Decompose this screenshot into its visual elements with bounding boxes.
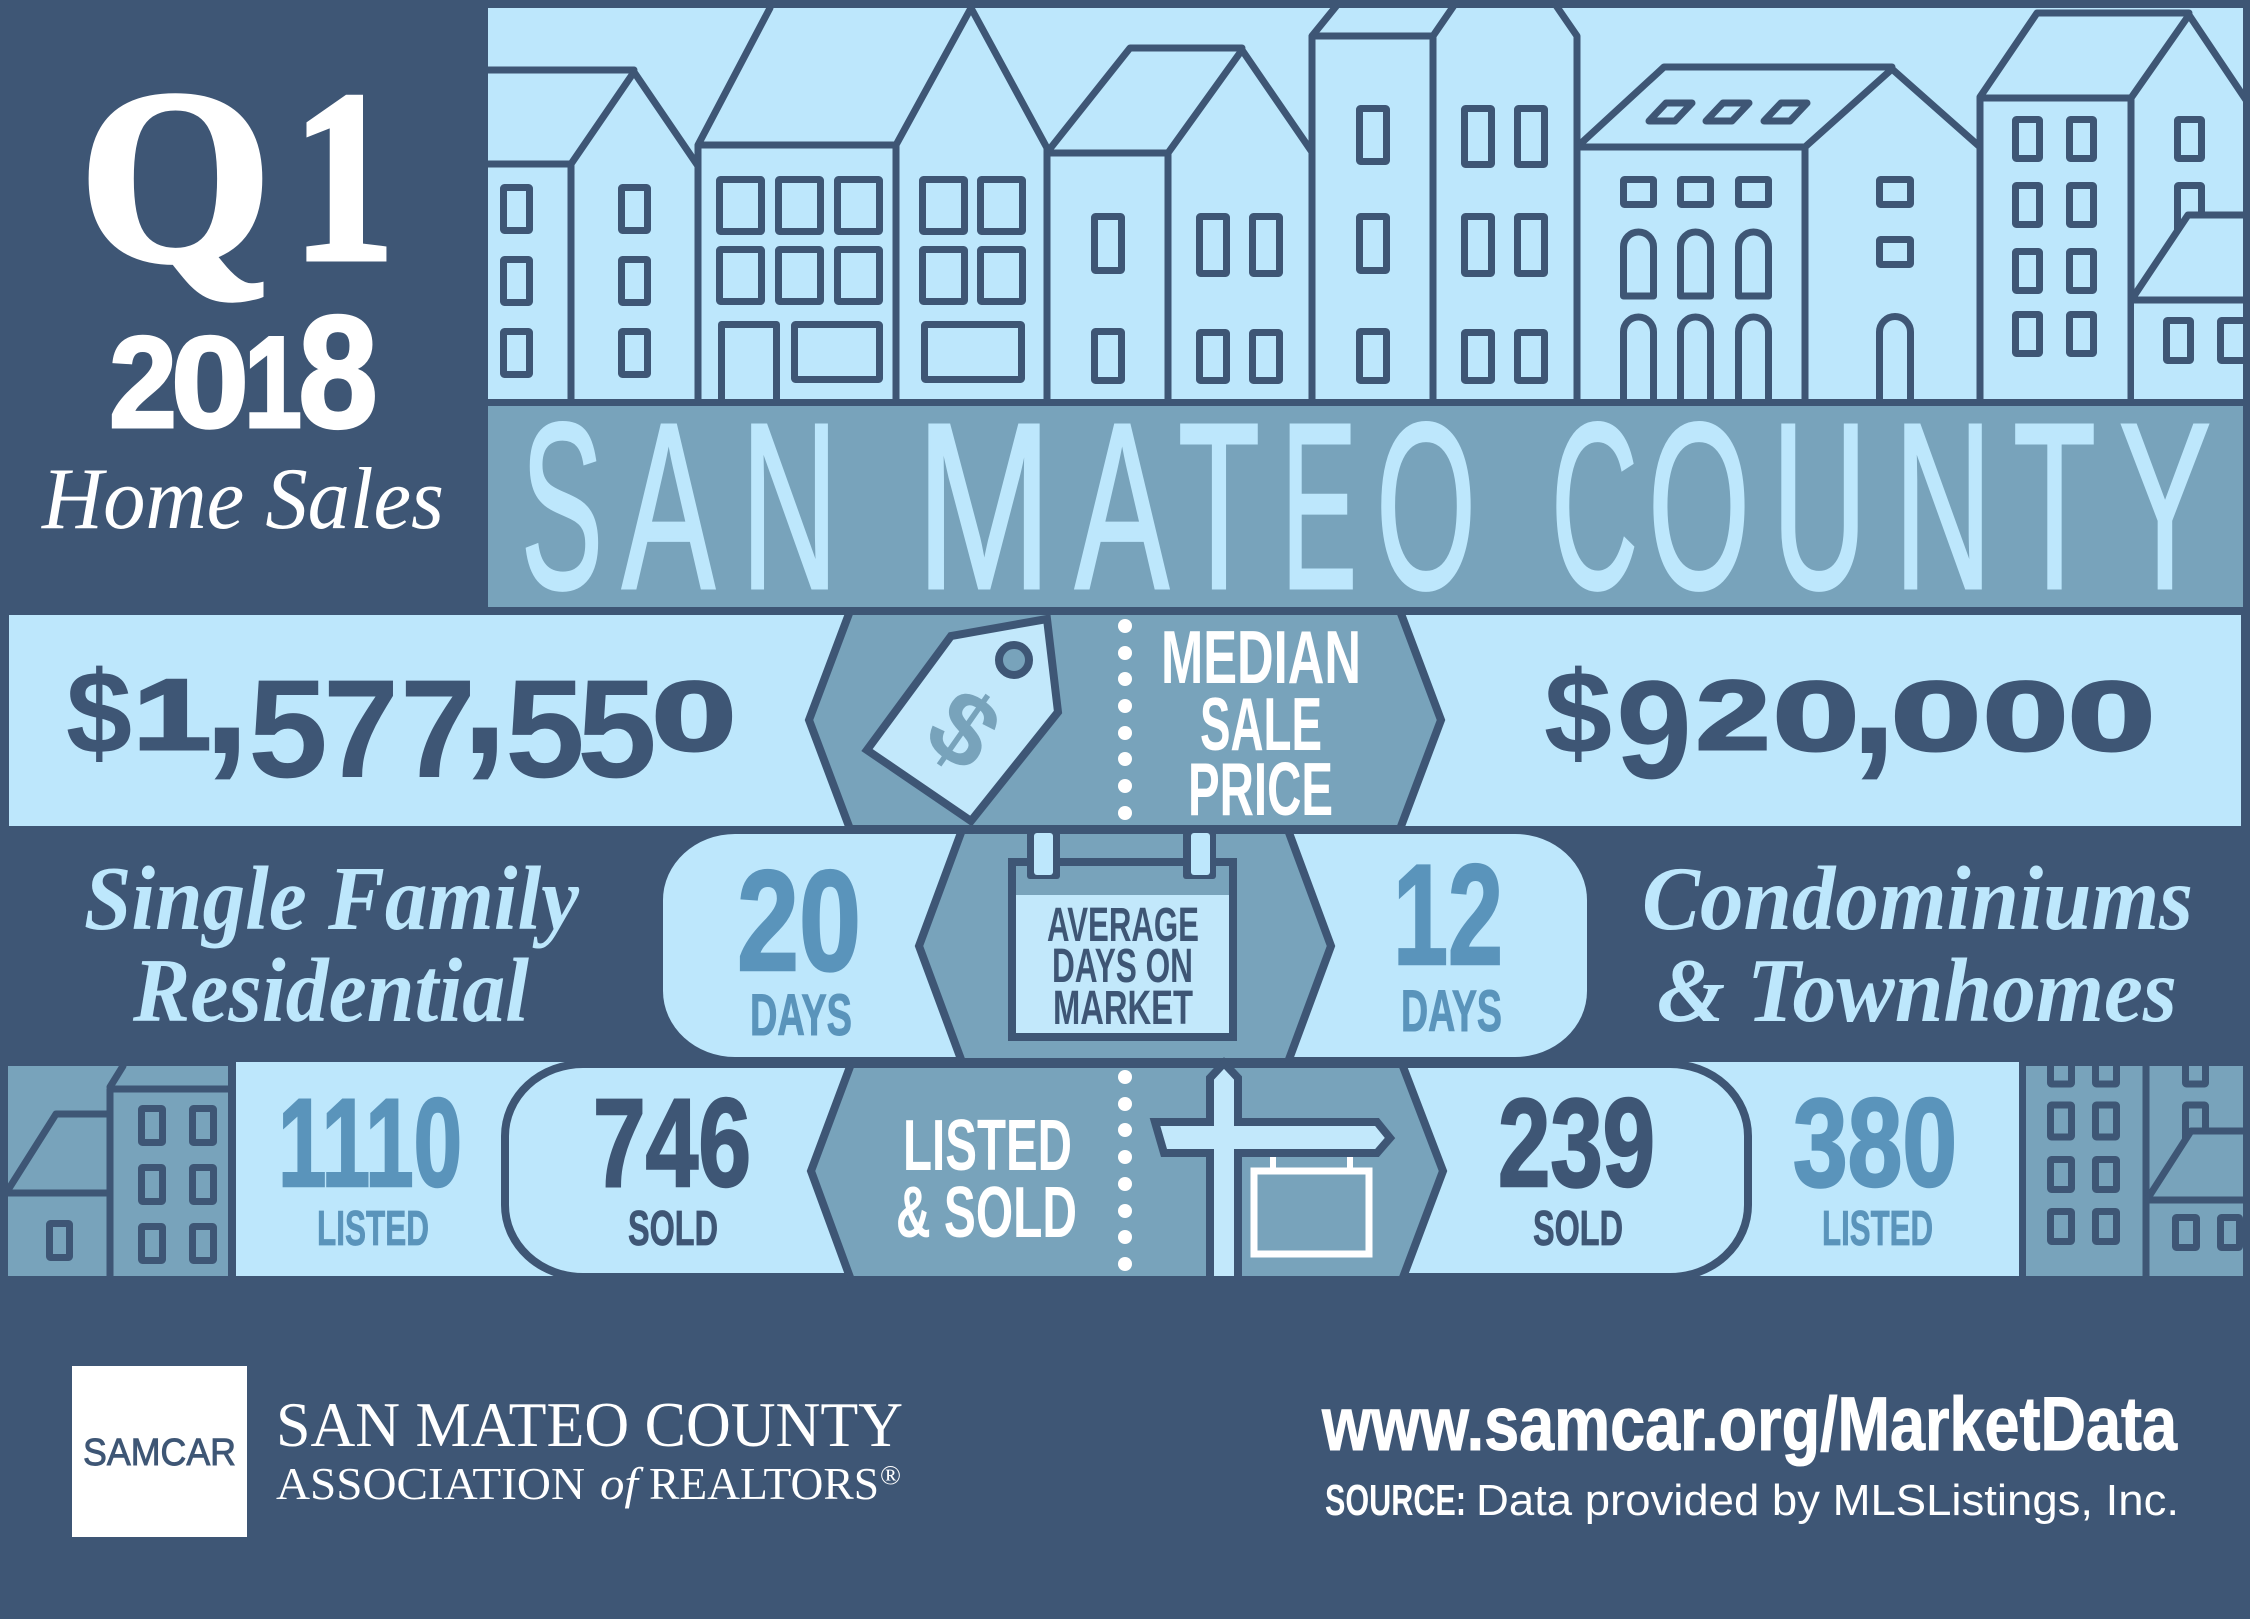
- text: data source: Data provided by MLSListings, Inc.: [1476, 1476, 2179, 1525]
- price: single family median: 1: [133, 659, 211, 771]
- logo: SAMCAR: [72, 1366, 247, 1537]
- house 6 windows: [2016, 120, 2202, 354]
- panel: average days on market row: [663, 830, 1587, 1062]
- illustration: right mini houses: [2026, 1058, 2243, 1276]
- banner: SAN MATEO COUNTY: E: [1281, 374, 1357, 639]
- label: listed and sold: & SOLD: [896, 1173, 1077, 1253]
- icon: for sale sign post: [1155, 1063, 1390, 1276]
- label: average days on market: DAYS ON: [1052, 940, 1193, 993]
- banner: SAN MATEO COUNTY: N: [741, 374, 838, 639]
- label: listed and sold: [896, 1106, 1077, 1253]
- stat: 1110 listed: LISTED: [317, 1202, 429, 1256]
- hexagon: median sale price: [809, 611, 1441, 829]
- label: average days on market: [1047, 899, 1199, 1035]
- banner: SAN MATEO COUNTY: O: [1648, 374, 1750, 639]
- stat: 746 sold: [593, 1074, 751, 1256]
- panel: median sale price row: [9, 600, 2241, 831]
- text: association name: of: [600, 1458, 645, 1509]
- stat: 20 days: DAYS: [750, 983, 852, 1048]
- house 5 skylights, windows and arches: [1624, 103, 1910, 402]
- price: condo median: ,: [1850, 600, 1897, 790]
- banner: SAN MATEO COUNTY: M: [916, 374, 1052, 639]
- title block: Q1 2018 Home Sales: [41, 39, 444, 548]
- heading: Q1: [79, 39, 395, 314]
- heading: 2018: 0: [171, 309, 249, 455]
- price: single family median: $: [66, 647, 132, 779]
- label: median sale price: MEDIAN: [1161, 615, 1361, 699]
- price: condo median: 9: [1616, 651, 1692, 808]
- price: single family median: 0: [652, 661, 736, 771]
- price: single family median: 7: [323, 650, 399, 807]
- house 4 outline: [1312, 4, 1577, 400]
- price: single family median: ,: [461, 600, 508, 790]
- banner: SAN MATEO COUNTY: S: [521, 374, 603, 639]
- banner: SAN MATEO COUNTY: O: [1376, 374, 1476, 639]
- price: single family median: 7: [400, 650, 476, 807]
- dotted divider: [1118, 619, 1132, 820]
- price: single family median: ,: [203, 600, 250, 790]
- house 4 windows: [1360, 108, 1544, 380]
- price: condo median: $: [1544, 647, 1612, 779]
- icon: price tag: $: [906, 666, 1020, 794]
- stat: 380 listed: LISTED: [1822, 1202, 1933, 1256]
- stat: 239 sold: [1498, 1074, 1655, 1256]
- heading: 2018: 2: [109, 309, 177, 455]
- label: single family residential: Residential: [132, 940, 530, 1041]
- stat: 12 days: 12: [1393, 836, 1503, 995]
- stat: 12 days: [1393, 836, 1503, 1044]
- price: single family median: 5: [577, 650, 657, 807]
- label: condominiums and townhomes: & Townhomes: [1657, 940, 2177, 1041]
- text: association name: [276, 1390, 903, 1509]
- banner: SAN MATEO COUNTY: U: [1772, 374, 1867, 639]
- text: association name: ASSOCIATION: [276, 1458, 585, 1509]
- price: condo median: 0: [2068, 661, 2155, 771]
- panel: listed and sold row: [236, 1062, 2019, 1280]
- house 1 windows: [504, 188, 648, 374]
- house 6 outline: [1980, 13, 2246, 400]
- price: condo median: 0: [1983, 661, 2068, 771]
- price: single family median: 5: [505, 650, 585, 807]
- label: listed and sold: LISTED: [903, 1106, 1072, 1186]
- label: average days on market: MARKET: [1053, 982, 1193, 1035]
- icon: price tag: [867, 619, 1058, 821]
- rounded pill outline: [505, 1064, 1748, 1277]
- heading: Q1: Q: [79, 39, 272, 314]
- house 1 outline: [488, 8, 1047, 400]
- banner: SAN MATEO COUNTY: A: [622, 374, 715, 639]
- hexagon: days on market: [919, 830, 1331, 1062]
- panel: house row illustration: [488, 4, 2250, 402]
- label: condominiums and townhomes: [1642, 848, 2193, 1041]
- label: median sale price: SALE: [1200, 682, 1322, 766]
- banner: SAN MATEO COUNTY: T: [2013, 374, 2096, 639]
- hexagon: listed and sold: [811, 1064, 1443, 1280]
- house 2 windows and door: [720, 180, 1022, 402]
- label: single family residential: [84, 848, 580, 1041]
- label: condominiums and townhomes: Condominiums: [1642, 848, 2193, 949]
- stat: 239 sold: SOLD: [1533, 1202, 1623, 1256]
- stat: 20 days: [737, 842, 861, 1048]
- banner: SAN MATEO COUNTY: N: [1894, 374, 1992, 639]
- price: condo median: 0: [1773, 661, 1859, 771]
- text: association name: REALTORS: [649, 1458, 879, 1509]
- heading: 2018: 1: [244, 309, 302, 455]
- logo: SAMCAR: SAMCAR: [83, 1432, 236, 1474]
- stat: 20 days: 20: [737, 842, 861, 1001]
- banner: SAN MATEO COUNTY: A: [1075, 374, 1169, 639]
- house 3 outline: [1047, 48, 1312, 400]
- text: association name: ®: [880, 1460, 901, 1490]
- stat: 12 days: DAYS: [1401, 979, 1502, 1044]
- text: data source: SOURCE:: [1325, 1476, 1466, 1525]
- price: condo median: 2: [1696, 660, 1770, 770]
- stat: 1110 listed: 1110: [278, 1074, 462, 1213]
- price: single family median: 5: [248, 650, 328, 807]
- illustration: left mini houses: [8, 1066, 228, 1276]
- heading: Q1: 1: [292, 41, 395, 312]
- heading: 2018: 8: [298, 282, 378, 461]
- banner: SAN MATEO COUNTY: [488, 374, 2243, 639]
- stat: 239 sold: 239: [1498, 1074, 1655, 1213]
- subheading: Home Sales: Home Sales: [41, 451, 444, 548]
- label: median sale price: PRICE: [1188, 747, 1333, 831]
- stat: 380 listed: 380: [1793, 1074, 1957, 1213]
- label: single family residential: Single Family: [84, 848, 580, 949]
- label: average days on market: AVERAGE: [1047, 899, 1199, 952]
- icon: calendar: [1012, 830, 1233, 1037]
- banner: SAN MATEO COUNTY: C: [1551, 374, 1638, 639]
- dotted divider: [1118, 1070, 1132, 1271]
- frame edge: [2243, 0, 2250, 1290]
- stat: 380 listed: [1793, 1074, 1957, 1256]
- label: median sale price: [1161, 615, 1361, 831]
- small house in front: [2134, 215, 2250, 400]
- text: association name: SAN MATEO COUNTY: [276, 1390, 903, 1460]
- stat: 746 sold: 746: [593, 1074, 751, 1213]
- house 5 outline: [1577, 67, 1980, 400]
- price: condo median: 0: [1891, 661, 1981, 771]
- stat: 1110 listed: [278, 1074, 462, 1256]
- house 3 windows: [1094, 216, 1280, 380]
- stat: 746 sold: SOLD: [628, 1202, 718, 1256]
- banner: SAN MATEO COUNTY: T: [1178, 374, 1260, 639]
